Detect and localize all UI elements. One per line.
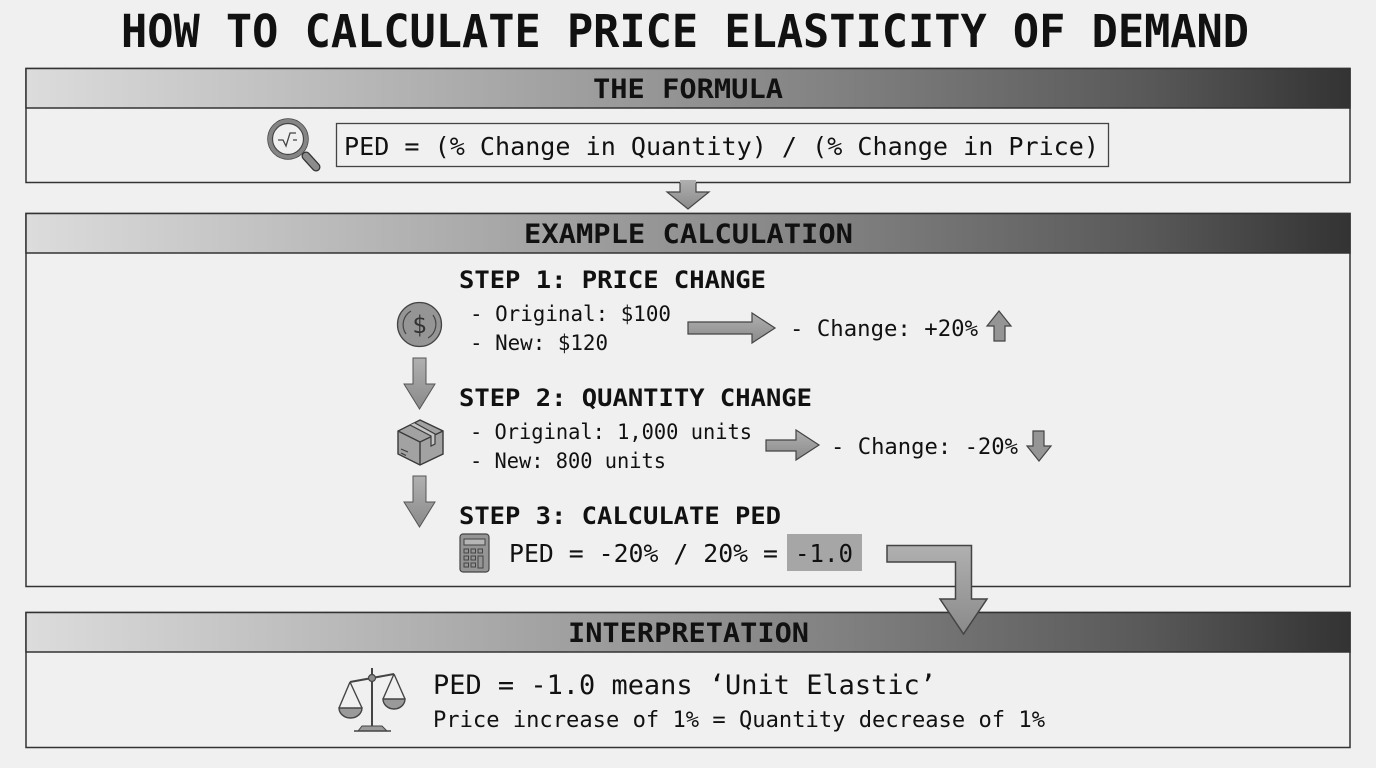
heading: example calculation: EXAMPLE CALCULATION: [524, 219, 853, 250]
icon: magnifying glass: [268, 119, 316, 167]
formula box: [336, 124, 1108, 166]
panel: interpretation: [26, 612, 1350, 748]
arrow: step 2 to step 3: [404, 476, 435, 527]
text block: step 2: [459, 384, 812, 473]
result highlight: [787, 534, 862, 571]
text: price change result: - Change: +20%: [790, 317, 978, 342]
icon: down arrow: [1027, 431, 1051, 461]
heading: example calculation: [26, 214, 1350, 253]
icon: balance scale: [339, 668, 405, 731]
icon: dollar coin: $: [412, 311, 427, 339]
icon: dollar coin: [398, 302, 442, 346]
text block: step 1: STEP 1: PRICE CHANGE: [459, 266, 766, 294]
arrow: step 1 result: [688, 313, 775, 343]
panel: example calculation: [26, 214, 1350, 586]
icon: up arrow: [987, 311, 1011, 341]
panel: the formula: [26, 68, 1350, 182]
text block: step 2: - New: 800 units: [470, 449, 666, 473]
heading: interpretation: INTERPRETATION: [568, 618, 809, 649]
heading: interpretation: [26, 612, 1350, 652]
heading: the formula: [26, 68, 1350, 108]
text: interpretation statement: PED = -1.0 means ‘Unit Elastic’: [433, 670, 936, 701]
arrow: formula to example: [667, 180, 709, 209]
text block: step 1: [459, 266, 766, 355]
icon: box: [398, 420, 443, 465]
result highlight: -1.0: [795, 539, 853, 568]
formula box: PED = (% Change in Quantity) / (% Change in Price): [344, 132, 1099, 161]
arrow: result to interpretation: [887, 546, 987, 634]
text block: step 3: STEP 3: CALCULATE PED: [459, 502, 781, 530]
text block: step 3: [459, 502, 781, 568]
text block: step 2: STEP 2: QUANTITY CHANGE: [459, 384, 812, 412]
text block: step 2: - Original: 1,000 units: [470, 420, 752, 444]
arrow: step 2 result: [766, 430, 819, 460]
title: HOW TO CALCULATE PRICE ELASTICITY OF DEMAND: [121, 5, 1249, 58]
text block: step 1: - New: $120: [470, 331, 608, 355]
text block: step 1: - Original: $100: [470, 302, 671, 326]
arrow: step 1 to step 2: [404, 358, 435, 409]
heading: the formula: THE FORMULA: [593, 74, 783, 105]
icon: calculator: [460, 534, 489, 572]
text: interpretation detail: Price increase of 1% = Quantity decrease of 1%: [433, 708, 1045, 733]
text: quantity change result: - Change: -20%: [831, 435, 1018, 460]
text block: step 3: PED = -20% / 20% =: [509, 539, 778, 568]
